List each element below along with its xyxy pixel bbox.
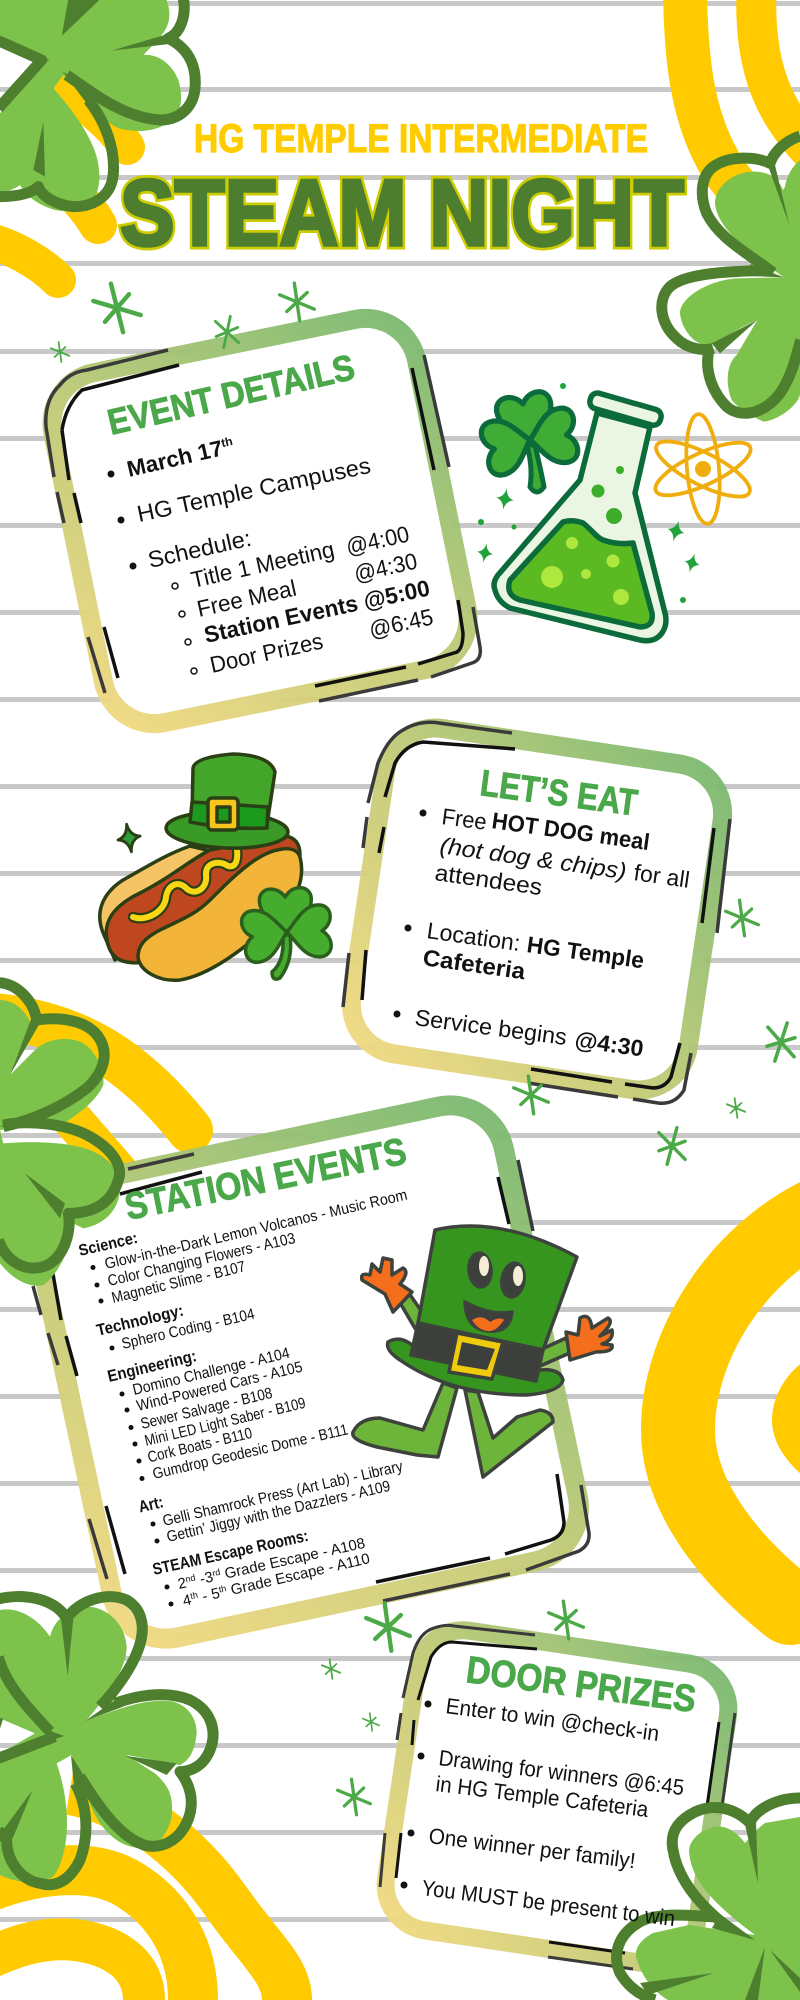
service line: @4:30	[573, 1026, 645, 1062]
schedule rows: Station Events @5:00	[202, 575, 432, 648]
icon: shamrock on hot dog	[240, 887, 332, 979]
panel: station events text	[77, 1131, 410, 1610]
meal line: (hot dog & chips)	[438, 832, 628, 884]
escape rooms list: Grade Escape - A110	[225, 1550, 372, 1600]
location line: HG Temple	[525, 931, 646, 973]
rainbow: top left	[0, 85, 127, 280]
science list: Magnetic Slime - B107	[110, 1258, 247, 1307]
green asterisk stars	[50, 279, 800, 1817]
icon: atom	[649, 413, 757, 525]
hat crown	[418, 1226, 577, 1350]
event date: th	[220, 434, 234, 450]
must be present line: You MUST be present to win	[420, 1875, 677, 1931]
engineering list: Gumdrop Geodesic Dome - B111	[151, 1421, 350, 1483]
technology list: Sphero Coding - B104	[120, 1306, 257, 1353]
engineering list: Cork Boats - B110	[146, 1425, 254, 1466]
schedule rows: @4:30	[351, 548, 420, 587]
panel: door prizes text	[400, 1649, 698, 1931]
science list: Color Changing Flowers - A103	[106, 1230, 297, 1290]
title: steam night: STEAM NIGHT	[120, 160, 684, 265]
escape rooms list: STEAM Escape Rooms:	[151, 1527, 310, 1579]
escape rooms list: 4	[181, 1591, 193, 1610]
schedule rows: @4:00	[343, 521, 412, 560]
heading: EVENT DETAILS	[104, 346, 358, 443]
meal line: attendees	[433, 859, 544, 900]
drawing lines: in HG Temple Cafeteria	[434, 1771, 651, 1822]
technology list: Technology:	[95, 1302, 185, 1340]
panel: event details frame	[43, 309, 480, 733]
escape rooms list: th	[218, 1583, 227, 1595]
illustration: hot dog with leprechaun hat	[100, 754, 332, 980]
escape rooms list	[151, 1527, 372, 1610]
art list: Gelli Shamrock Press (Art Lab) - Library	[161, 1458, 405, 1530]
illustration: leprechaun hat character	[353, 1226, 612, 1477]
arms	[396, 1289, 422, 1330]
engineering list: Engineering:	[106, 1347, 198, 1386]
location line	[421, 917, 646, 984]
escape rooms list: nd	[184, 1572, 196, 1584]
drawing lines	[434, 1745, 686, 1822]
clover: bottom left	[0, 1597, 213, 1885]
escape rooms list: - 5	[197, 1585, 221, 1606]
escape rooms list: th	[189, 1590, 199, 1601]
one winner line: One winner per family!	[427, 1823, 637, 1873]
panel: let's eat frame	[343, 721, 730, 1103]
icon: shamrock	[479, 390, 579, 492]
escape rooms list: Grade Escape - A108	[219, 1535, 367, 1583]
art list: Gettin’ Jiggy with the Dazzlers - A109	[165, 1478, 392, 1546]
schedule rows: @6:45	[366, 603, 436, 643]
clover: top left	[0, 0, 195, 211]
engineering list: Mini LED Light Saber - B109	[143, 1395, 307, 1450]
band	[411, 1323, 543, 1381]
bullets	[90, 1265, 174, 1606]
escape rooms list: -3	[194, 1569, 215, 1589]
meal line: for all	[632, 859, 691, 893]
rainbow: bottom left	[0, 1790, 287, 2000]
eyes	[468, 1252, 492, 1288]
schedule label: Schedule:	[145, 525, 254, 573]
brim	[388, 1339, 563, 1395]
engineering list: Domino Challenge - A104	[131, 1345, 292, 1399]
engineering list: Sewer Salvage - B108	[139, 1385, 274, 1433]
escape rooms list: 2	[176, 1575, 188, 1593]
rainbow: top right	[685, 0, 800, 255]
escape rooms list: rd	[211, 1567, 221, 1578]
location: HG Temple Campuses	[135, 452, 373, 527]
gloves	[362, 1258, 612, 1360]
clover: top right	[662, 136, 800, 422]
engineering list	[106, 1345, 350, 1483]
legs	[353, 1383, 457, 1457]
schedule rows: Title 1 Meeting	[188, 536, 337, 593]
illustration: science flask, shamrock and atom	[475, 383, 757, 641]
clover: middle left	[0, 983, 120, 1286]
title: steam night: STEAM NIGHT	[120, 160, 684, 265]
meal line: Free	[440, 803, 488, 835]
mouth	[465, 1302, 512, 1331]
icon: sparkles and dots	[475, 383, 702, 603]
heading: STATION EVENTS	[121, 1131, 410, 1229]
panel: let's eat text	[394, 762, 691, 1062]
bullets	[400, 1700, 432, 1888]
bullets	[394, 810, 426, 1018]
panel: station events frame	[27, 1095, 589, 1649]
check-in line: Enter to win @check-in	[444, 1693, 661, 1746]
drawing lines: Drawing for winners @6:45	[437, 1745, 686, 1800]
location line: Cafeteria	[421, 944, 527, 984]
buckle	[449, 1333, 503, 1379]
rainbow: middle left	[0, 1015, 190, 1180]
engineering list: Wind-Powered Cars - A105	[135, 1359, 304, 1415]
rainbow: right	[678, 1205, 800, 1608]
icon: dark sparkle	[116, 822, 142, 854]
schedule rows: Door Prizes	[207, 628, 325, 678]
clover: bottom right	[617, 1798, 800, 2000]
art list: Art:	[137, 1493, 165, 1516]
heading: DOOR PRIZES	[464, 1649, 698, 1721]
heading: LET’S EAT	[478, 762, 640, 824]
science list	[77, 1187, 409, 1307]
service line: Service begins	[413, 1004, 568, 1050]
schedule rows	[172, 521, 436, 678]
schedule rows: Free Meal	[194, 575, 299, 622]
science list: Science:	[77, 1230, 139, 1260]
event date: March 17	[125, 436, 225, 482]
title: school name: HG TEMPLE INTERMEDIATE	[194, 117, 648, 161]
panel: event details text	[104, 346, 436, 678]
science list: Glow-in-the-Dark Lemon Volcanos - Music Room	[103, 1187, 409, 1273]
service line	[413, 1004, 645, 1062]
location line: Location:	[425, 917, 522, 956]
bullets	[108, 470, 136, 570]
panel: door prizes frame	[379, 1624, 735, 1970]
meal line: HOT DOG meal	[490, 807, 651, 855]
meal line	[433, 803, 691, 900]
icon: flask	[494, 391, 666, 641]
